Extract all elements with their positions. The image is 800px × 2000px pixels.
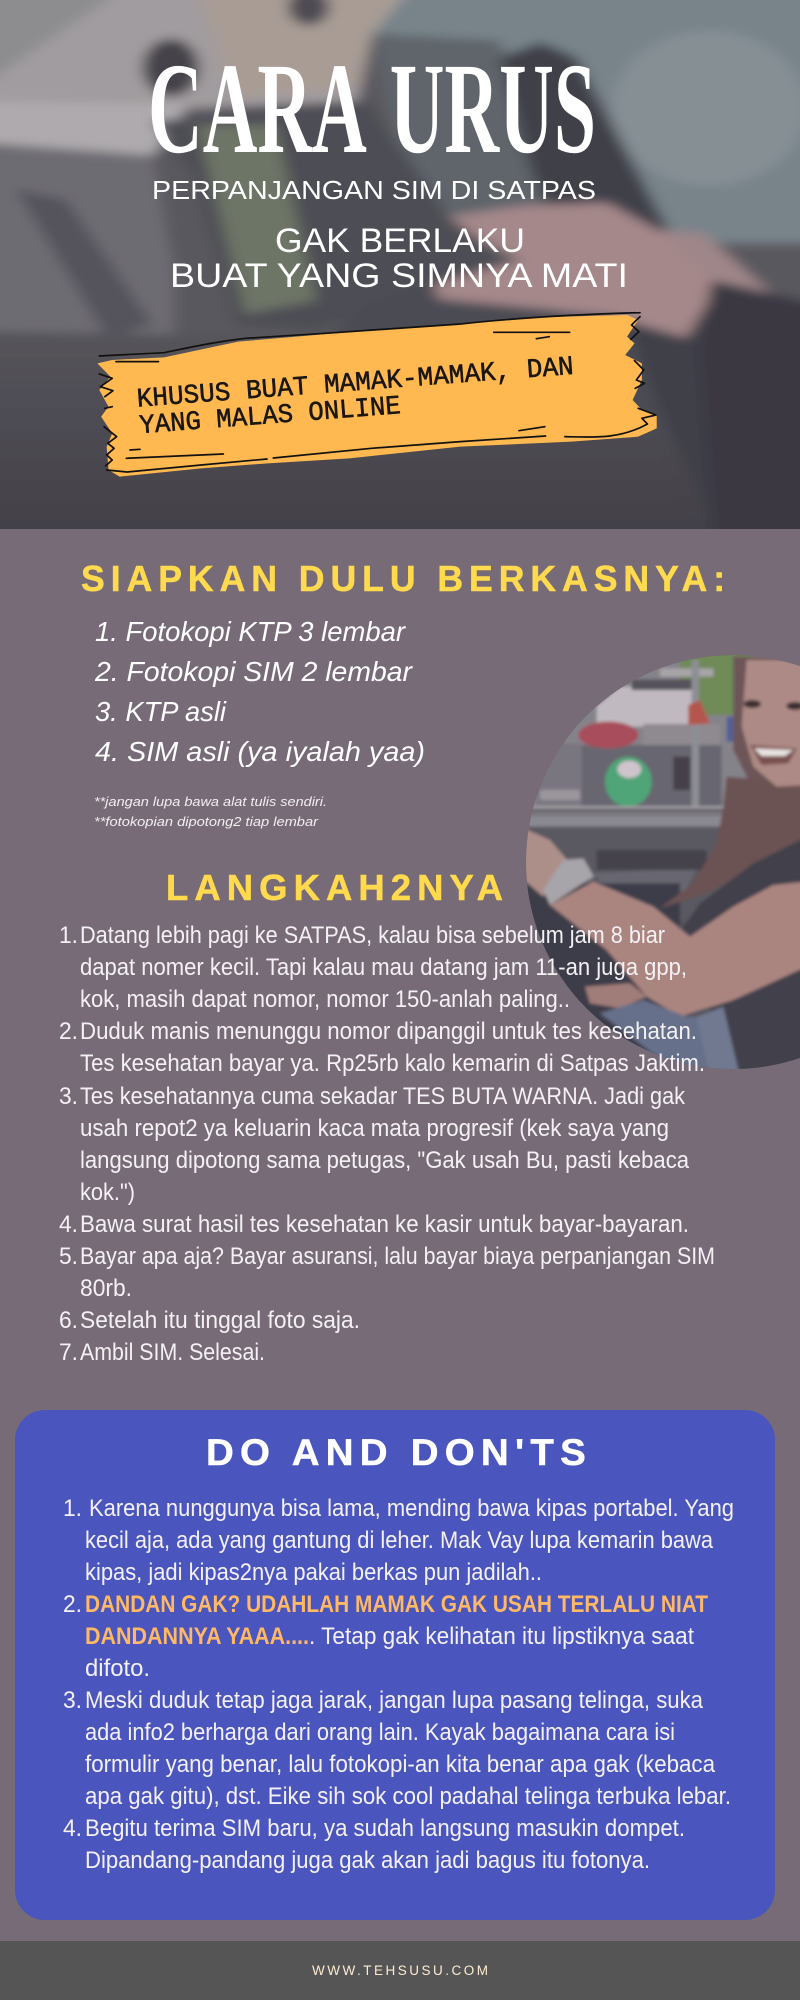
steps list: Tes kesehatannya cuma sekadar TES BUTA WARNA. Jadi gak (80, 1083, 686, 1110)
tips list: Karena nunggunya bisa lama, mending bawa kipas portabel. Yang (89, 1495, 734, 1522)
steps list: 4. (59, 1211, 78, 1238)
steps list: 3. (59, 1083, 78, 1110)
steps list: langsung dipotong sama petugas, "Gak usah Bu, pasti kebaca (80, 1147, 690, 1174)
steps list: Ambil SIM. Selesai. (80, 1339, 265, 1366)
banner text: YANG MALAS ONLINE (138, 392, 402, 442)
steps list: Duduk manis menunggu nomor dipanggil untuk tes kesehatan. (80, 1018, 697, 1045)
documents list (94, 616, 425, 767)
tips list: DANDAN GAK? UDAHLAH MAMAK GAK USAH TERLALU NIAT (85, 1591, 708, 1618)
documents list: 3. KTP asli (95, 696, 227, 727)
documents list: 4. SIM asli (ya iyalah yaa) (95, 736, 425, 767)
tips list: Dipandang-pandang juga gak akan jadi bagus itu fotonya. (85, 1847, 650, 1874)
tips list: difoto. (85, 1655, 150, 1682)
steps list: 80rb. (80, 1275, 132, 1302)
note: not applicable (170, 222, 628, 295)
footnotes: **fotokopian dipotong2 tiap lembar (94, 814, 319, 829)
note: not applicable: BUAT YANG SIMNYA MATI (170, 257, 628, 295)
steps list: kok.") (80, 1179, 135, 1206)
tips list: 3. (63, 1687, 82, 1714)
hero panel (0, 0, 800, 554)
footer (0, 1941, 800, 2000)
section: documents to prepare (81, 558, 731, 829)
section: steps (59, 867, 715, 1366)
footnotes (94, 794, 327, 829)
steps list: Tes kesehatan bayar ya. Rp25rb kalo kemarin di Satpas Jaktim. (80, 1050, 705, 1077)
circular photo: woman driving (513, 643, 800, 1080)
footer website: WWW.TEHSUSU.COM (312, 1963, 488, 1978)
callout: torn yellow banner (97, 313, 657, 477)
tips list: apa gak gitu), dst. Eike sih sok cool padahal telinga terbuka lebar. (85, 1783, 731, 1810)
tips list: formulir yang benar, lalu fotokopi-an kita benar apa gak (kebaca (85, 1751, 716, 1778)
steps list: Bayar apa aja? Bayar asuransi, lalu bayar biaya perpanjangan SIM (80, 1243, 715, 1270)
steps list: 5. (59, 1243, 78, 1270)
steps list: Setelah itu tinggal foto saja. (80, 1307, 360, 1334)
tips list: kipas, jadi kipas2nya pakai berkas pun jadilah.. (85, 1559, 542, 1586)
banner text (136, 353, 575, 442)
tips list: Begitu terima SIM baru, ya sudah langsung masukin dompet. (85, 1815, 685, 1842)
tips list: 2. (63, 1591, 82, 1618)
tips list: ada info2 berharga dari orang lain. Kayak bagaimana cara isi (85, 1719, 675, 1746)
documents list: 2. Fotokopi SIM 2 lembar (94, 656, 414, 687)
tips list: DANDANNYA YAAA.... (85, 1623, 309, 1650)
steps list: dapat nomer kecil. Tapi kalau mau datang jam 11-an juga gpp, (80, 954, 687, 981)
subtitle: PERPANJANGAN SIM DI SATPAS (152, 175, 596, 205)
tips list (63, 1495, 734, 1874)
documents list: 1. Fotokopi KTP 3 lembar (95, 616, 407, 647)
steps list: kok, masih dapat nomor, nomor 150-anlah paling.. (80, 986, 570, 1013)
steps list: Bawa surat hasil tes kesehatan ke kasir untuk bayar-bayaran. (80, 1211, 689, 1238)
panel: do and don'ts (15, 1410, 775, 1920)
steps list (59, 922, 715, 1366)
tips list: . Tetap gak kelihatan itu lipstiknya saat (309, 1623, 694, 1650)
heading: siapkan berkas: SIAPKAN DULU BERKASNYA: (81, 558, 731, 599)
steps list: 2. (59, 1018, 78, 1045)
tips list: 1. (63, 1495, 82, 1522)
heading: do and don'ts: DO AND DON'TS (206, 1432, 592, 1473)
note: not applicable: GAK BERLAKU (275, 222, 525, 260)
steps list: 1. (59, 922, 78, 949)
steps list: usah repot2 ya keluarin kaca mata progresif (kek saya yang (80, 1115, 669, 1142)
tips list: Meski duduk tetap jaga jarak, jangan lupa pasang telinga, suka (85, 1687, 704, 1714)
tips list: kecil aja, ada yang gantung di leher. Mak Vay lupa kemarin bawa (85, 1527, 714, 1554)
footnotes: **jangan lupa bawa alat tulis sendiri. (94, 794, 327, 809)
steps list: Datang lebih pagi ke SATPAS, kalau bisa sebelum jam 8 biar (80, 922, 665, 949)
heading: langkah: LANGKAH2NYA (166, 867, 509, 908)
steps list: 7. (59, 1339, 78, 1366)
tips list: 4. (63, 1815, 82, 1842)
steps list: 6. (59, 1307, 78, 1334)
banner text: KHUSUS BUAT MAMAK-MAMAK, DAN (136, 353, 575, 416)
hero photo: hands on steering wheel (0, 0, 800, 554)
